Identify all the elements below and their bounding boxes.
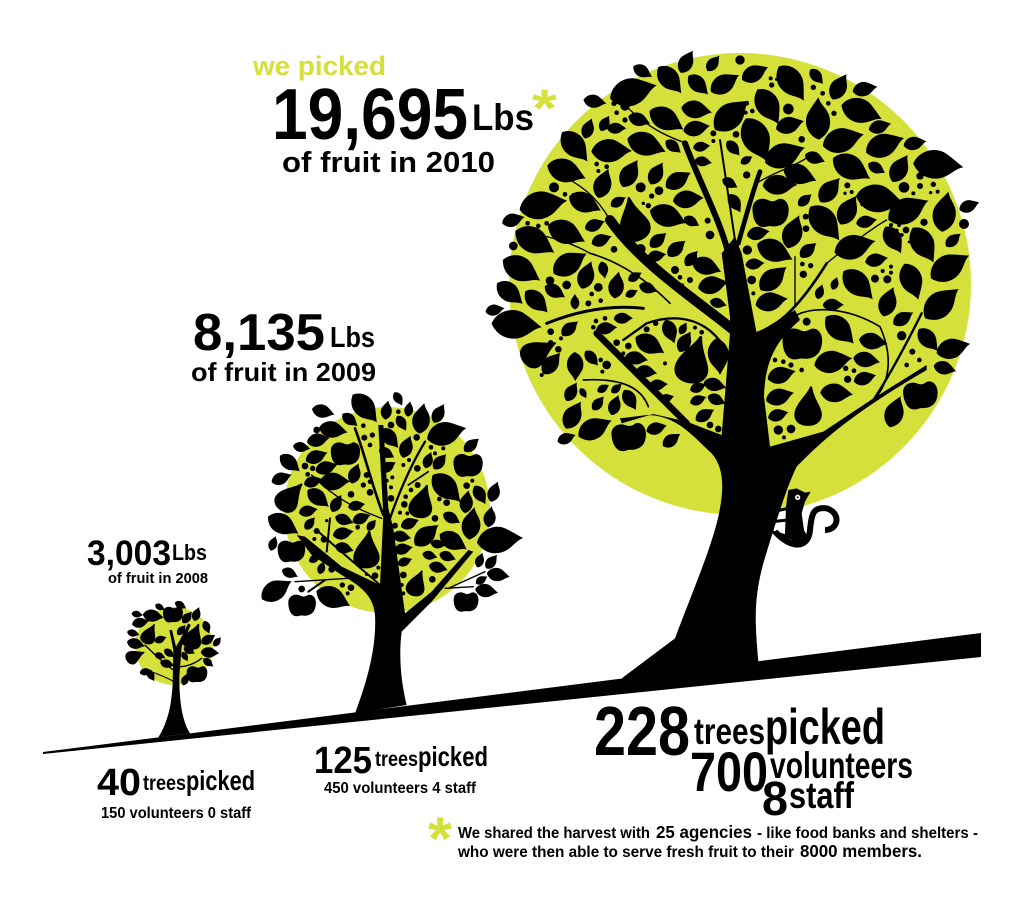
heading: 2009 total: of fruit in 2009 — [191, 357, 376, 387]
leaves and fruit of small tree — [123, 599, 224, 687]
stats: 2008: 40 — [97, 762, 141, 804]
sun circle: 2009 tree — [284, 407, 490, 613]
fruit dots of medium tree — [298, 409, 474, 595]
heading: 2009 total — [191, 304, 376, 387]
pears and apples of medium tree — [271, 442, 483, 616]
small tree 2008 — [123, 599, 224, 737]
stats: 2009: trees — [375, 748, 418, 771]
footnote: * — [428, 805, 453, 872]
stats: 2009 — [314, 740, 488, 797]
footnote: who were then able to serve fresh fruit to their — [457, 844, 794, 861]
large tree 2010 — [485, 47, 981, 683]
stats: 2010: staff — [789, 775, 855, 816]
stats: 2010: 700 — [690, 740, 768, 803]
stats: 2008: 150 volunteers 0 staff — [101, 805, 252, 822]
stats: 2009: 125 — [314, 740, 372, 782]
medium tree 2009 — [257, 387, 524, 713]
stats: 2010: 228 — [594, 692, 690, 770]
footnote: - like food banks and shelters - — [757, 825, 978, 842]
pears and apples of large tree — [516, 193, 939, 452]
sun circle: 2010 tree — [509, 53, 971, 515]
stats: 2008: picked — [186, 765, 255, 796]
icon: squirrel — [772, 488, 837, 545]
stats: 2009: 450 volunteers 4 staff — [324, 780, 477, 797]
footnote — [428, 805, 978, 872]
stats: 2010: trees — [694, 711, 765, 752]
heading: 2010 total — [252, 51, 558, 179]
stats: 2010: picked — [765, 699, 885, 755]
stats: 2010: 8 — [762, 773, 788, 826]
heading: 2010 total: 19,695 — [272, 75, 468, 155]
footnote: We shared the harvest with — [458, 825, 650, 842]
leaves of large tree — [485, 47, 981, 451]
stats: 2009: picked — [418, 741, 488, 772]
stats: 2008 — [97, 762, 255, 822]
heading: 2010 total: we picked — [252, 51, 386, 81]
heading: 2010 total: * — [532, 80, 558, 138]
heading: 2010 total: Lbs — [472, 97, 534, 138]
heading: 2008 total — [87, 534, 208, 587]
stats: 2008: trees — [143, 772, 186, 795]
heading: 2008 total: of fruit in 2008 — [108, 570, 208, 587]
heading: 2009 total: Lbs — [330, 322, 375, 354]
footnote: 25 agencies — [656, 822, 752, 842]
leaves of medium tree — [257, 387, 524, 615]
stats: 2010 — [594, 692, 913, 826]
fruit dots of large tree — [509, 55, 969, 439]
heading: 2009 total: 8,135 — [193, 304, 325, 362]
stats: 2010: volunteers — [770, 745, 913, 786]
heading: 2008 total: 3,003 — [87, 534, 171, 573]
heading: 2008 total: Lbs — [172, 540, 207, 565]
sun circle: 2008 tree — [135, 607, 213, 685]
ground slope — [43, 633, 981, 754]
heading: 2010 total: of fruit in 2010 — [282, 147, 495, 179]
footnote: 8000 members. — [800, 841, 922, 861]
